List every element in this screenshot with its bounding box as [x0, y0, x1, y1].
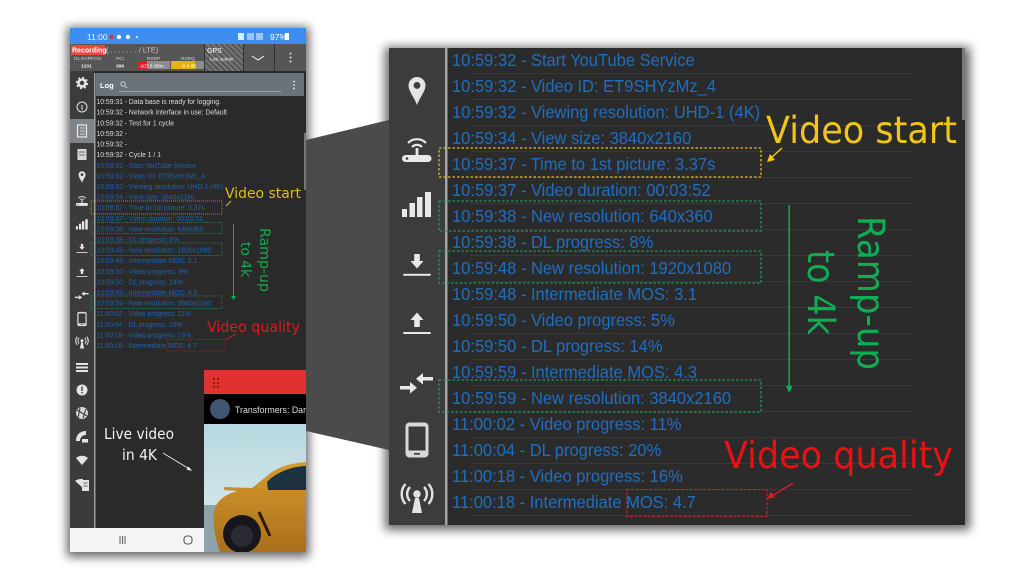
measurement header: DL EARFCN: [74, 56, 102, 62]
measurement header: RSRP: [147, 56, 160, 62]
phone log lines: 10:59:50 - DL progress: 14%: [96, 279, 184, 286]
zoomed log lines: 11:00:04 - DL progress: 20%: [452, 439, 661, 460]
status bar: 11:00: [87, 32, 108, 42]
icon: globe: [76, 407, 88, 419]
measurement header: Last update: [210, 56, 234, 62]
zoomed log lines: 10:59:50 - Video progress: 5%: [452, 309, 675, 330]
icon: antenna: [402, 484, 432, 513]
measurement header: [70, 44, 306, 71]
log header: Log: [100, 81, 114, 90]
icon: log: [78, 125, 86, 137]
zoomed log lines: 10:59:32 - Video ID: ET9SHYzMz_4: [452, 75, 716, 96]
annotation: video quality: Video quality: [724, 434, 953, 477]
phone log lines: 11:00:02 - Video progress: 11%: [96, 311, 191, 318]
zoomed log lines: 10:59:32 - Start YouTube Service: [452, 49, 695, 70]
icon: upload: [403, 312, 431, 334]
zoomed scrollbar: [962, 48, 965, 120]
measurement header: RSRQ: [181, 56, 195, 62]
phone log lines: 10:59:48 - New resolution: 1920x1080: [96, 247, 211, 255]
measurement header: 1201: [81, 64, 92, 70]
zoomed log lines: 10:59:32 - Viewing resolution: UHD-1 (4K): [452, 101, 760, 122]
icon: phone: [406, 422, 428, 458]
phone log lines: 10:59:38 - DL progress: 8%: [96, 237, 180, 244]
phone log lines: 10:59:37 - Time to 1st picture: 3.37s: [96, 205, 205, 212]
phone log lines: 10:59:32 - Start YouTube Service: [96, 163, 196, 170]
panel: zoomed log: [389, 48, 965, 525]
phone log lines: 10:59:59 - New resolution: 3840x2160: [96, 300, 211, 308]
measurement header: ( . . . . . . . / LTE): [106, 46, 158, 54]
icon: gear: [77, 78, 87, 88]
phone log lines: 10:59:31 - Data base is ready for logging.: [96, 99, 221, 106]
phone log lines: 11:00:18 - Intermediate MOS: 4.7: [96, 343, 197, 350]
zoomed log lines: 10:59:37 - Video duration: 00:03:52: [452, 179, 711, 200]
highlight boxes: new resolution: [439, 201, 761, 412]
icon: download: [403, 254, 431, 276]
phone log lines: 10:59:32 -: [96, 131, 128, 138]
zoomed log lines: 11:00:02 - Video progress: 11%: [452, 413, 681, 434]
bottom navigation bar: [70, 528, 204, 552]
icon: warning: [76, 384, 88, 396]
measurement header: -107.8 dBm: [139, 64, 164, 70]
zoomed log lines: 10:59:37 - Time to 1st picture: 3.37s: [452, 153, 716, 174]
video player: Transformers: Dar: [235, 405, 306, 416]
phone log lines: 10:59:32 - Cycle 1 / 1: [96, 152, 161, 159]
icon: call: [76, 431, 88, 442]
phone log lines: 11:00:04 - DL progress: 20%: [96, 322, 183, 329]
zoomed log lines: [452, 49, 760, 512]
phone log lines: 10:59:32 - Network interface in use: Default: [96, 110, 227, 117]
measurement header: Recording: [72, 48, 107, 54]
phone log lines: 10:59:34 - View size: 3840x2160: [96, 194, 195, 202]
phone annotation: video start: Video start: [225, 186, 301, 202]
zoomed log lines: 10:59:38 - DL progress: 8%: [452, 231, 653, 252]
panel: phone screenshot: [70, 28, 306, 553]
icon: wifi document: [75, 479, 89, 491]
icon: location pin: [408, 77, 426, 105]
phone log lines: 10:59:32 - Video ID: ET9SHYzMz_4: [96, 173, 205, 180]
zoomed log lines: 11:00:18 - Video progress: 16%: [452, 465, 683, 486]
annotation: live video in 4K: Live video: [104, 425, 174, 443]
annotation: video quality: [724, 434, 953, 499]
phone log lines: 11:00:18 - Video progress: 16%: [96, 332, 192, 339]
phone annotation: ramp-up to 4k: to 4k: [237, 242, 253, 278]
phone annotation: video quality: Video quality: [207, 318, 300, 336]
measurement header: PCI: [116, 56, 124, 62]
phone log lines: 10:59:50 - Video progress: 5%: [96, 269, 189, 276]
icon: wifi: [76, 456, 88, 465]
log header: [96, 73, 304, 96]
icon: menu: [76, 363, 88, 372]
phone annotation: ramp-up to 4k: [231, 224, 272, 300]
annotation: ramp-up to 4k: Ramp-up: [849, 216, 892, 370]
phone log lines: 10:59:32 - Test for 1 cycle: [96, 120, 174, 127]
phone highlight boxes: [91, 201, 225, 351]
icon: signal bars: [402, 192, 431, 217]
phone log lines: [96, 99, 227, 350]
icon: info: [77, 102, 87, 112]
icon: documents: [78, 149, 86, 160]
measurement header: -9.0 dB: [181, 64, 196, 70]
phone scrollbar: [304, 133, 306, 190]
highlight box: time to first picture: [439, 148, 761, 177]
phone log lines: 10:59:32 - Viewing resolution: UHD-1 (4K): [96, 184, 223, 191]
status bar: 97%: [270, 32, 287, 42]
annotation: live video in 4K: in 4K: [122, 446, 158, 464]
zoomed log lines: 10:59:38 - New resolution: 640x360: [452, 205, 713, 226]
phone annotation: ramp-up to 4k: Ramp-up: [256, 228, 272, 292]
annotation: ramp-up to 4k: to 4k: [799, 250, 842, 336]
measurement header: 396: [116, 64, 124, 70]
phone log lines: 10:59:59 - Intermediate MOS: 4.3: [96, 290, 197, 297]
zoomed log lines: 10:59:59 - New resolution: 3840x2160: [452, 387, 731, 408]
status bar: [70, 28, 306, 44]
phone log lines: 10:59:37 - Video duration: 00:03:52: [96, 216, 203, 223]
zoomed sidebar: [389, 48, 448, 525]
phone log lines: 10:59:48 - Intermediate MOS: 3.1: [96, 258, 197, 265]
zoomed log lines: 11:00:18 - Intermediate MOS: 4.7: [452, 491, 696, 512]
icon: handover arrows: [400, 373, 433, 394]
icon: router: [402, 139, 432, 162]
video player: [204, 370, 306, 553]
phone log lines: 10:59:32 -: [96, 141, 128, 149]
zoomed log lines: 10:59:34 - View size: 3840x2160: [452, 127, 691, 148]
annotation: live video in 4K: [104, 425, 192, 471]
zoomed log lines: 10:59:48 - New resolution: 1920x1080: [452, 257, 731, 278]
zoomed log lines: 10:59:59 - Intermediate MOS: 4.3: [452, 361, 697, 382]
connector between phone and zoomed panel: [306, 120, 389, 450]
phone log lines: 10:59:38 - New resolution: 640x360: [96, 226, 204, 233]
annotation: ramp-up to 4k: [786, 205, 892, 393]
highlight box: MOS: [627, 490, 767, 516]
annotation: video start: Video start: [766, 109, 957, 152]
zoomed log lines: 10:59:48 - Intermediate MOS: 3.1: [452, 283, 697, 304]
zoomed log lines: 10:59:50 - DL progress: 14%: [452, 335, 663, 356]
phone sidebar: [70, 71, 96, 528]
measurement header: GPS: [207, 48, 222, 55]
